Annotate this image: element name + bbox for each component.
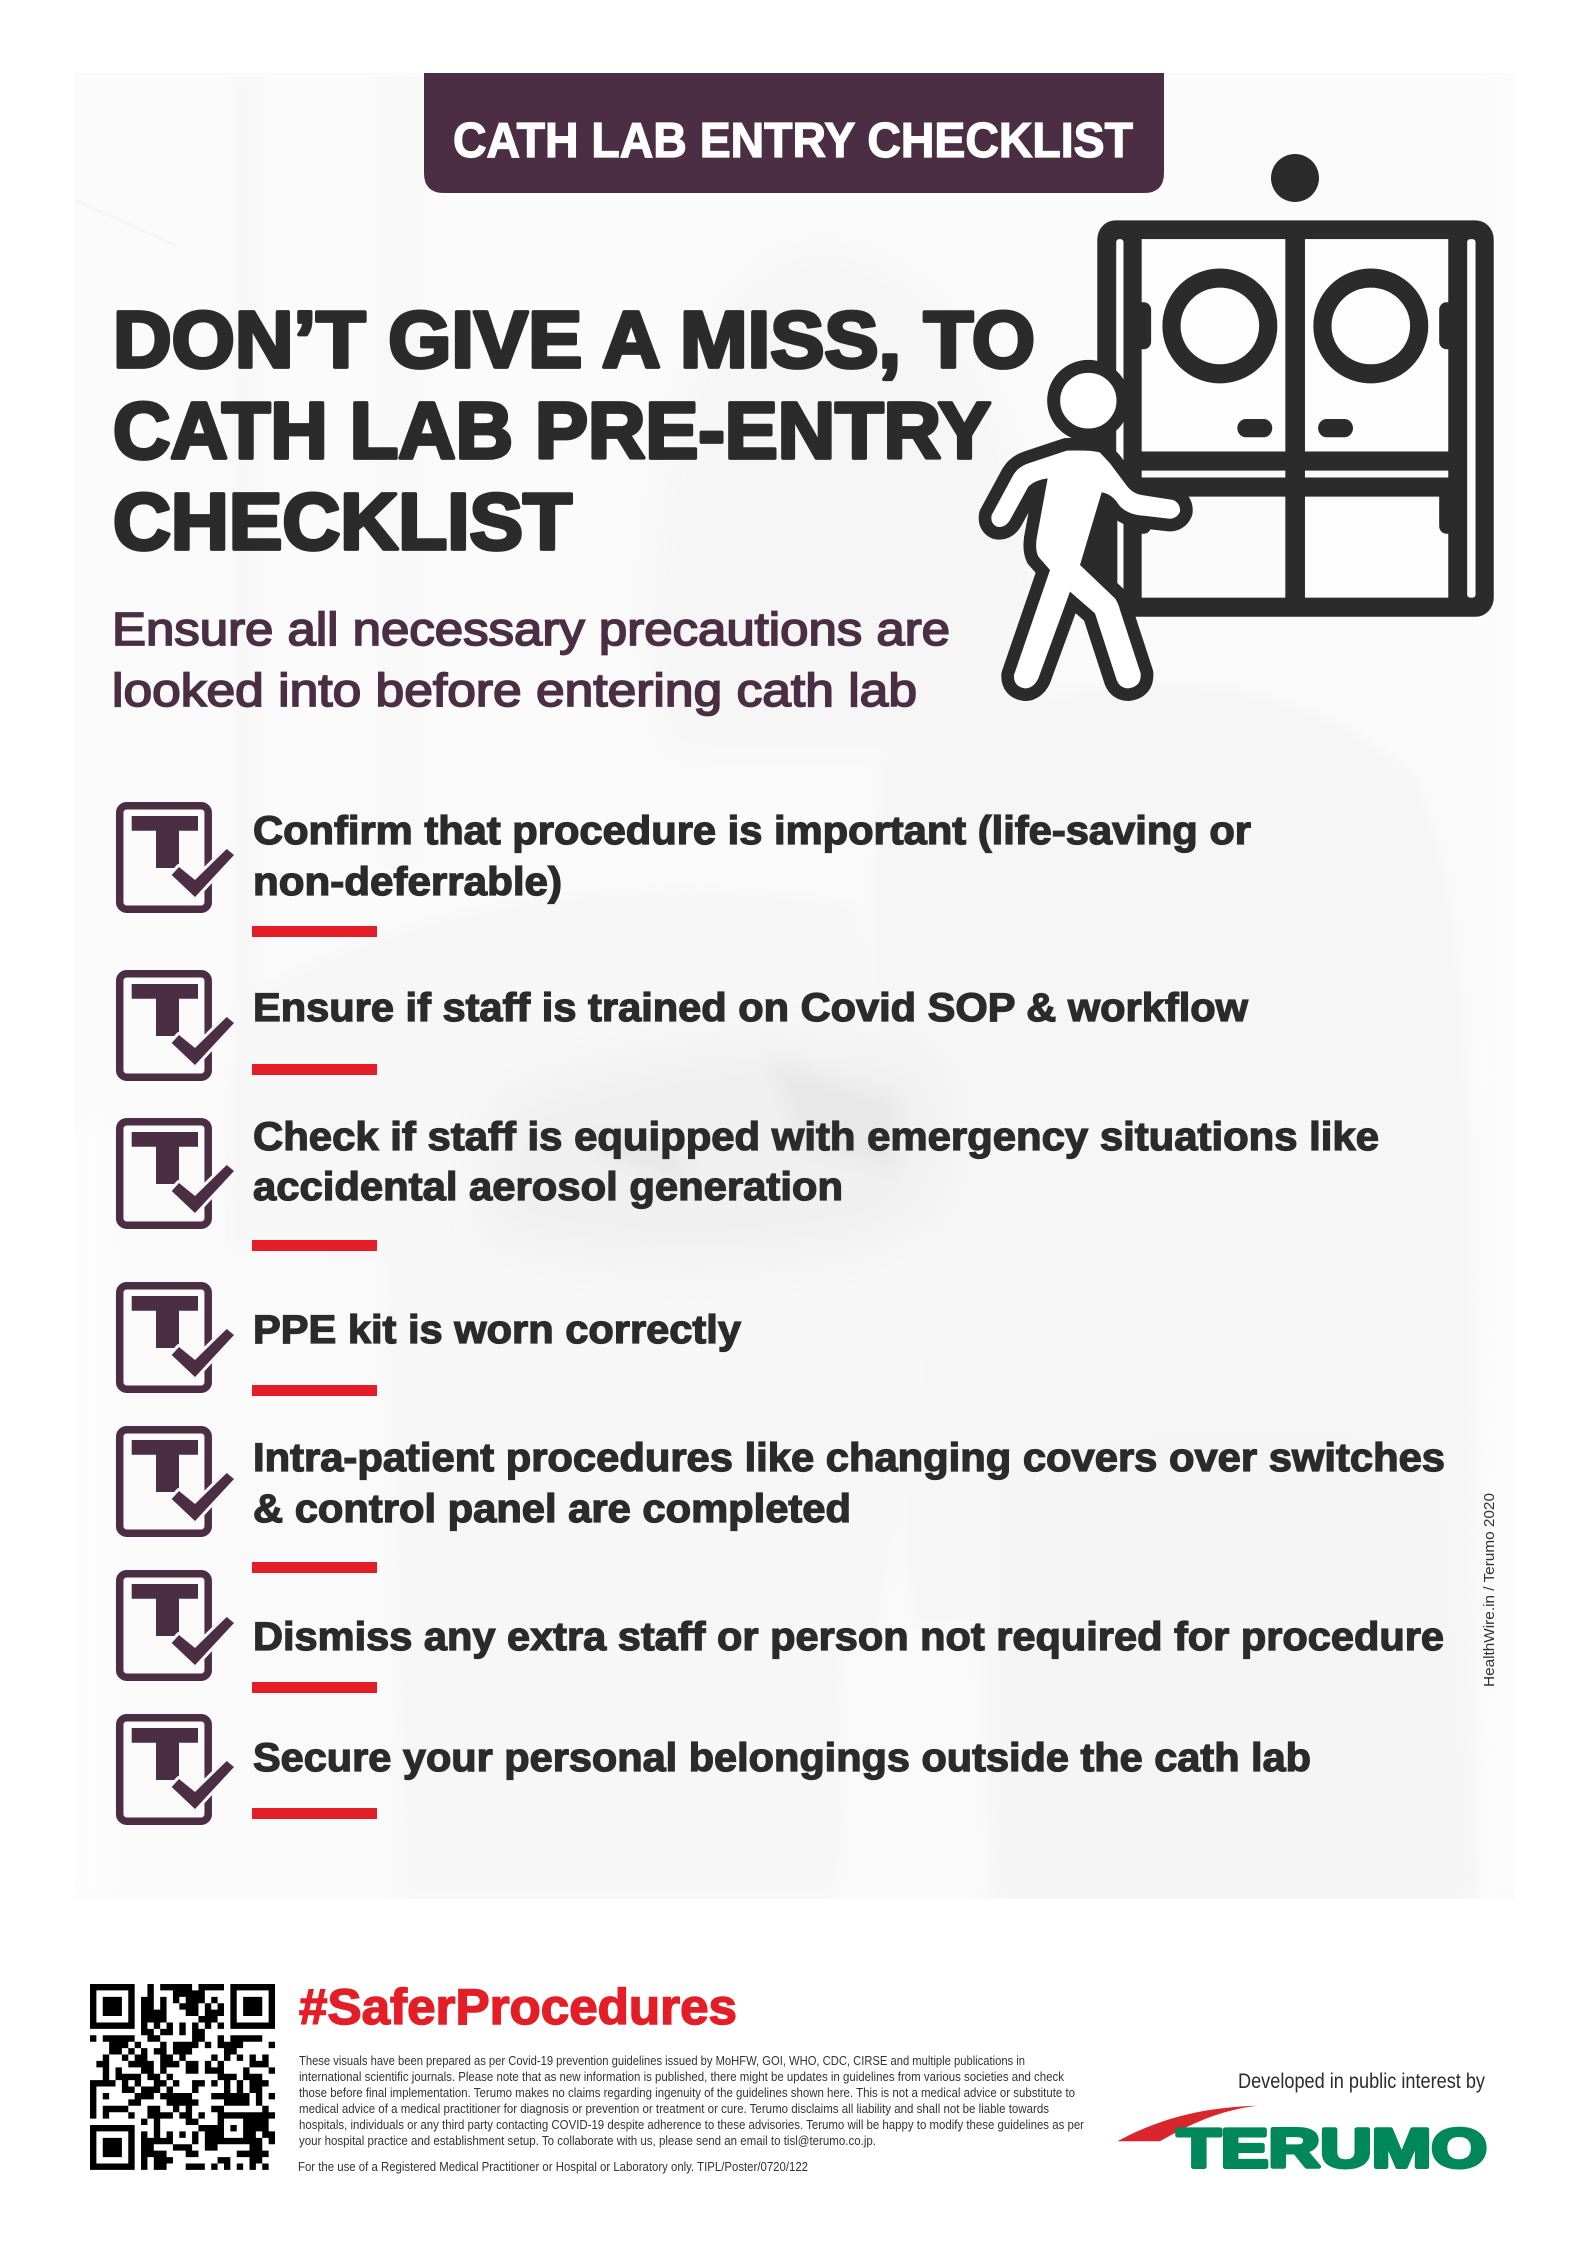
disclaimer text: international scientific journals. Please note that as new information is published, there might be updates in guidelines from various societies and check	[299, 2069, 1064, 2084]
developer credit: Developed in public interest by	[1238, 2070, 1485, 2093]
icon: walking person	[991, 366, 1180, 688]
checklist item 1	[120, 806, 1251, 937]
item text	[253, 1436, 1445, 1531]
item text: Intra-patient procedures like changing covers over switches	[253, 1436, 1445, 1480]
item text: Secure your personal belongings outside the cath lab	[253, 1736, 1311, 1780]
main heading	[113, 295, 1035, 566]
icon: check mark box	[120, 1718, 234, 1821]
item text: & control panel are completed	[253, 1487, 851, 1531]
QR code	[90, 1984, 275, 2170]
disclaimer text	[299, 2053, 1085, 2148]
item text: PPE kit is worn correctly	[253, 1308, 742, 1352]
checklist item 3	[120, 1115, 1379, 1251]
checklist item 2	[120, 974, 1249, 1077]
item text: Dismiss any extra staff or person not required for procedure	[253, 1615, 1444, 1659]
icon: check mark box	[120, 1430, 234, 1533]
icon: double door	[1097, 220, 1494, 617]
item text: Check if staff is equipped with emergency situations like	[253, 1115, 1379, 1159]
main heading: CATH LAB PRE-ENTRY	[113, 386, 991, 475]
checklist	[120, 806, 1445, 1821]
disclaimer text: your hospital practice and establishment setup. To collaborate with us, please send an email to tisl@terumo.co.jp.	[299, 2133, 876, 2148]
icon: check mark box	[120, 806, 234, 909]
Terumo logo	[1117, 2106, 1487, 2179]
item text: Ensure if staff is trained on Covid SOP & workflow	[253, 986, 1249, 1030]
item text	[253, 809, 1251, 904]
item text: accidental aerosol generation	[253, 1165, 843, 1209]
logo wordmark: TERUMO	[1177, 2117, 1487, 2179]
subheading: looked into before entering cath lab	[112, 664, 917, 716]
checklist item 5	[120, 1430, 1445, 1573]
disclaimer text: hospitals, individuals or any third party contacting COVID-19 despite adherence to these advisories. Terumo will be happy to modify these guidelines as per	[299, 2117, 1085, 2132]
disclaimer text: These visuals have been prepared as per Covid-19 prevention guidelines issued by MoHFW, GOI, WHO, CDC, CIRSE and multiple publications in	[299, 2053, 1025, 2068]
item text: non-deferrable)	[253, 860, 562, 904]
vertical credit: HealthWire.in / Terumo 2020	[1481, 1493, 1498, 1687]
icon: check mark box	[120, 1122, 234, 1225]
icon: person walking through cath lab doors	[991, 154, 1494, 688]
item text	[253, 1115, 1379, 1209]
main heading: DON’T GIVE A MISS, TO	[113, 295, 1035, 384]
icon: check mark box	[120, 974, 234, 1077]
main heading: CHECKLIST	[113, 477, 572, 566]
subheading	[112, 603, 950, 716]
background photo panel	[74, 73, 1515, 1899]
icon: check mark box	[120, 1286, 234, 1389]
checklist item 7	[120, 1718, 1311, 1821]
logo swoosh	[1117, 2106, 1258, 2141]
usage note: For the use of a Registered Medical Practitioner or Hospital or Laboratory only. TIPL/Poster/0720/122	[298, 2159, 808, 2174]
checklist item 6	[120, 1574, 1444, 1693]
checklist item 4	[120, 1286, 742, 1396]
hashtag: #SaferProcedures	[299, 1979, 737, 2035]
item text: Confirm that procedure is important (life-saving or	[253, 809, 1251, 853]
disclaimer text: those before final implementation. Terumo makes no claims regarding ingenuity of the guidelines shown here. This is not a medical advice or substitute to	[299, 2085, 1075, 2100]
icon: check mark box	[120, 1574, 234, 1677]
disclaimer text: medical advice of a medical practitioner for diagnosis or prevention or treatment or cure. Terumo disclaims all liability and shall not be liable towards	[299, 2101, 1049, 2116]
header banner	[424, 73, 1164, 193]
subheading: Ensure all necessary precautions are	[112, 603, 950, 655]
icon: indicator light	[1271, 154, 1319, 202]
header banner title: CATH LAB ENTRY CHECKLIST	[453, 114, 1133, 168]
